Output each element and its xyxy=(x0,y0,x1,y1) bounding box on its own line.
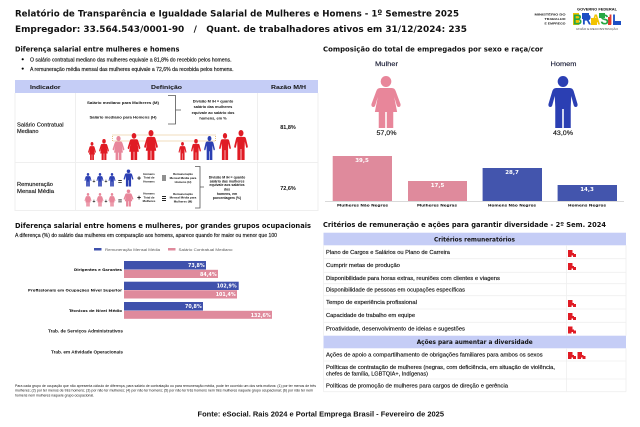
definition: remuneração média: Mulheres (M) xyxy=(174,200,192,204)
definition: remuneração média: Mensal Média para xyxy=(170,176,197,180)
definition: remuneração média: Homens xyxy=(143,172,155,176)
footnote: mulheres; (2) por ter menos de três homens; (3) por não ter mulheres; (4) por não ter homens; (5) por não ter três homens nem três mulheres naquele grupo ocupacional; (6) por não ter nem xyxy=(15,388,313,392)
definition: remuneração média: Divisão M /H = quanto xyxy=(209,175,245,179)
bar chart: grupos ocupacionais: Dirigentes e Garantes xyxy=(74,267,123,272)
row label: salário contratual: Salário Contratual xyxy=(17,123,64,129)
action rows: chefes de família, LGBTQIA+, Indígenas) xyxy=(326,371,428,377)
logo: ministério e governo federal: UNIÃO E RECONSTRUÇÃO xyxy=(576,26,619,31)
definition: salário mediano: homens, em % xyxy=(199,115,227,120)
definition: salário mediano: Divisão M /H = quanto xyxy=(193,98,234,104)
criteria rows: Capacidade de trabalho em equipe xyxy=(326,313,415,319)
heading: diferença salarial: Diferença salarial entre mulheres e homens xyxy=(15,46,180,54)
icon: mulher: Mulher xyxy=(375,61,398,68)
table heading: critérios: Critérios remuneratórios xyxy=(434,235,515,243)
table header: Indicador xyxy=(30,85,61,91)
logo: ministério e governo federal: MINISTÉRIO DO xyxy=(534,11,566,16)
bar chart: composição por sexo e raça: Homens Negros xyxy=(568,202,607,208)
row label: salário contratual: Mediano xyxy=(17,129,38,135)
action rows: Políticas de contratação de mulheres (negras, com deficiência, em situação de violência, xyxy=(326,365,555,371)
definition: salário mediano: salário das mulheres xyxy=(194,104,232,109)
definition: remuneração média: porcentagem (%) xyxy=(213,196,241,200)
definition: salário mediano: equivale ao salário dos xyxy=(192,110,234,115)
bar chart: composição por sexo e raça: 28,7 xyxy=(505,170,519,176)
definition: remuneração média: + xyxy=(137,176,141,182)
definition: salário mediano: Salário mediano para Mulheres (M) xyxy=(87,101,160,105)
definition: remuneração média: salário das mulheres xyxy=(210,179,244,183)
bar chart: composição por sexo e raça: 17,5 xyxy=(431,183,444,189)
title: Empregador: 33.564.543/0001-90 / Quant. de trabalhadores ativos em 31/12/2024: 235 xyxy=(15,25,467,35)
title: Relatório de Transparência e Igualdade Salarial de Mulheres e Homens - 1º Semestre 2025 xyxy=(15,8,459,20)
logo: ministério e governo federal: TRABALHO xyxy=(544,17,566,21)
bar chart: grupos ocupacionais: 132,6% xyxy=(251,313,271,319)
definition: remuneração média: Homens (H) xyxy=(175,180,191,184)
bar chart: grupos ocupacionais: Trab. de Serviços Administrativos xyxy=(48,328,124,334)
bar chart: grupos ocupacionais: 70,8% xyxy=(185,304,202,310)
bar chart: grupos ocupacionais: Profissionais em Ocupações Nível Superior xyxy=(28,288,122,292)
bullet list: A remuneração média mensal das mulheres equivale a 72,6% da recebida pelos homens. xyxy=(30,67,234,73)
definition: remuneração média: + xyxy=(93,199,96,205)
definition: salário mediano xyxy=(87,96,234,124)
definition: remuneração média: dos xyxy=(224,188,230,192)
table: indicadores xyxy=(15,80,318,211)
definition: remuneração média: Total de xyxy=(144,195,155,199)
definition: remuneração média: Mulheres xyxy=(143,199,156,203)
criteria rows: Tempo de experiência profissional xyxy=(326,300,417,306)
logo: ministério e governo federal xyxy=(534,8,621,31)
bar chart: grupos ocupacionais: Técnicos de Nível Médio xyxy=(69,308,122,313)
row label: remuneração: Remuneração xyxy=(17,182,53,188)
bar chart: grupos ocupacionais: 84,4% xyxy=(200,272,217,278)
definition: remuneração média: + xyxy=(105,179,108,185)
source: Fonte: eSocial. Rais 2024 e Portal Emprega Brasil - Fevereiro de 2025 xyxy=(198,409,444,418)
icon: homem: 43,0% xyxy=(553,130,574,137)
heading: critérios: Critérios de remuneração e ações para garantir diversidade - 2º Sem. 2024 xyxy=(323,221,606,229)
razão: remuneração: 72,6% xyxy=(280,186,296,192)
definition: remuneração média: = xyxy=(118,179,122,186)
criteria rows: Cumprir metas de produção xyxy=(326,263,400,269)
definition: remuneração média: equivale aos salários xyxy=(209,183,245,187)
definition: remuneração média: Mensal Média para xyxy=(170,196,197,200)
action rows: Ações de apoio a compartilhamento de obrigações familiares para ambos os sexos xyxy=(326,352,543,358)
icons: marcadores vermelhos xyxy=(568,250,586,359)
footnote xyxy=(15,384,316,397)
bar chart: composição por sexo e raça xyxy=(325,156,624,208)
footnote: Para cada grupo de ocupação que não apresenta cálculo de diferença, para salário de contratação ou para remuneração média, pode ter ocorrido um dos seis motivos: (1) por ter menos de três xyxy=(15,384,316,388)
razão: salário contratual: 81,8% xyxy=(280,125,296,131)
legend xyxy=(94,248,232,252)
legend: Remuneração Mensal Média xyxy=(105,248,161,252)
table heading: ações: Ações para aumentar a diversidade xyxy=(417,339,533,346)
definition: remuneração média: Homens xyxy=(143,180,155,184)
bullet list xyxy=(22,58,234,73)
bar chart: composição por sexo e raça: Mulheres Não Negros xyxy=(337,202,389,208)
definition: remuneração média: Remuneração xyxy=(173,172,193,176)
bar chart: grupos ocupacionais: 73,8% xyxy=(188,263,205,269)
definition: remuneração média: homens, em xyxy=(217,192,237,196)
bar chart: composição por sexo e raça: 39,5 xyxy=(355,158,369,164)
bar chart: grupos ocupacionais: 101,4% xyxy=(216,292,236,298)
bar chart: grupos ocupacionais: Trab. em Atividade Operacionais xyxy=(51,350,124,354)
table header: Definição xyxy=(151,85,183,91)
definition: remuneração média: + xyxy=(137,195,141,202)
logo: ministério e governo federal: GOVERNO FEDERAL xyxy=(577,8,617,12)
pictogram: pessoas ordenadas por salário xyxy=(88,130,248,160)
criteria rows: Disponibilidade para horas extras, reuniões com clientes e viagens xyxy=(326,276,500,282)
action rows: Políticas de promoção de mulheres para cargos de direção e gerência xyxy=(326,383,509,389)
heading: grupos ocupacionais: Diferença salarial entre homens e mulheres, por grandes grupos ocupacionais xyxy=(15,222,311,230)
legend: Salário Contratual Mediano xyxy=(178,248,232,252)
table header: Razão M/H xyxy=(271,85,306,91)
criteria rows xyxy=(326,250,500,332)
icon: mulher: 57,0% xyxy=(376,130,397,137)
icon: homem xyxy=(548,61,578,137)
criteria rows: Proatividade, desenvolvimento de ideias e sugestões xyxy=(326,326,465,332)
action rows xyxy=(326,352,555,389)
icon: homem: Homem xyxy=(550,61,576,68)
bar chart: composição por sexo e raça: Homens Não Negros xyxy=(488,202,537,208)
subtitle: grupos ocupacionais: A diferença (%) do salário das mulheres em comparação aos homens, aparece quando for maior ou menor que 100 xyxy=(15,233,277,239)
bar chart: grupos ocupacionais: 102,9% xyxy=(217,284,237,290)
definition: remuneração média: Total de xyxy=(144,176,155,180)
row label: remuneração: Mensal Média xyxy=(17,189,55,195)
criteria rows: Disponibilidade de pessoas em ocupações específicas xyxy=(326,288,465,294)
definition: remuneração média xyxy=(85,166,245,208)
criteria rows: Plano de Cargos e Salários ou Plano de Carreira xyxy=(326,250,451,256)
bullet list: O salário contratual mediano das mulheres equivale a 81,8% do recebido pelos homens. xyxy=(30,58,232,64)
table: critérios remuneratórios xyxy=(324,233,626,392)
definition: remuneração média: + xyxy=(93,179,96,185)
bar chart: grupos ocupacionais xyxy=(28,261,272,354)
heading: composição: Composição do total de empregados por sexo e raça/cor xyxy=(323,46,544,54)
logo: ministério e governo federal: E EMPREGO xyxy=(544,22,566,26)
table header xyxy=(30,85,306,91)
definition: remuneração média: + xyxy=(105,199,108,205)
definition: remuneração média: = xyxy=(118,198,122,206)
definition: remuneração média: Homens xyxy=(143,192,155,196)
title xyxy=(15,8,467,35)
row label: salário contratual xyxy=(17,123,64,135)
definition: remuneração média: Remuneração xyxy=(173,192,193,196)
row label: remuneração xyxy=(17,182,55,195)
bar chart: composição por sexo e raça: 14,3 xyxy=(580,187,594,193)
bar chart: composição por sexo e raça: Mulheres Negras xyxy=(417,202,458,208)
icon: mulher xyxy=(371,61,401,137)
definition: salário mediano: Salário mediano para Homens (H) xyxy=(90,116,157,120)
logo: ministério e governo federal: BRASIL xyxy=(573,12,620,28)
footnote: homens nem mulheres naquele grupo ocupacional. xyxy=(15,393,94,397)
